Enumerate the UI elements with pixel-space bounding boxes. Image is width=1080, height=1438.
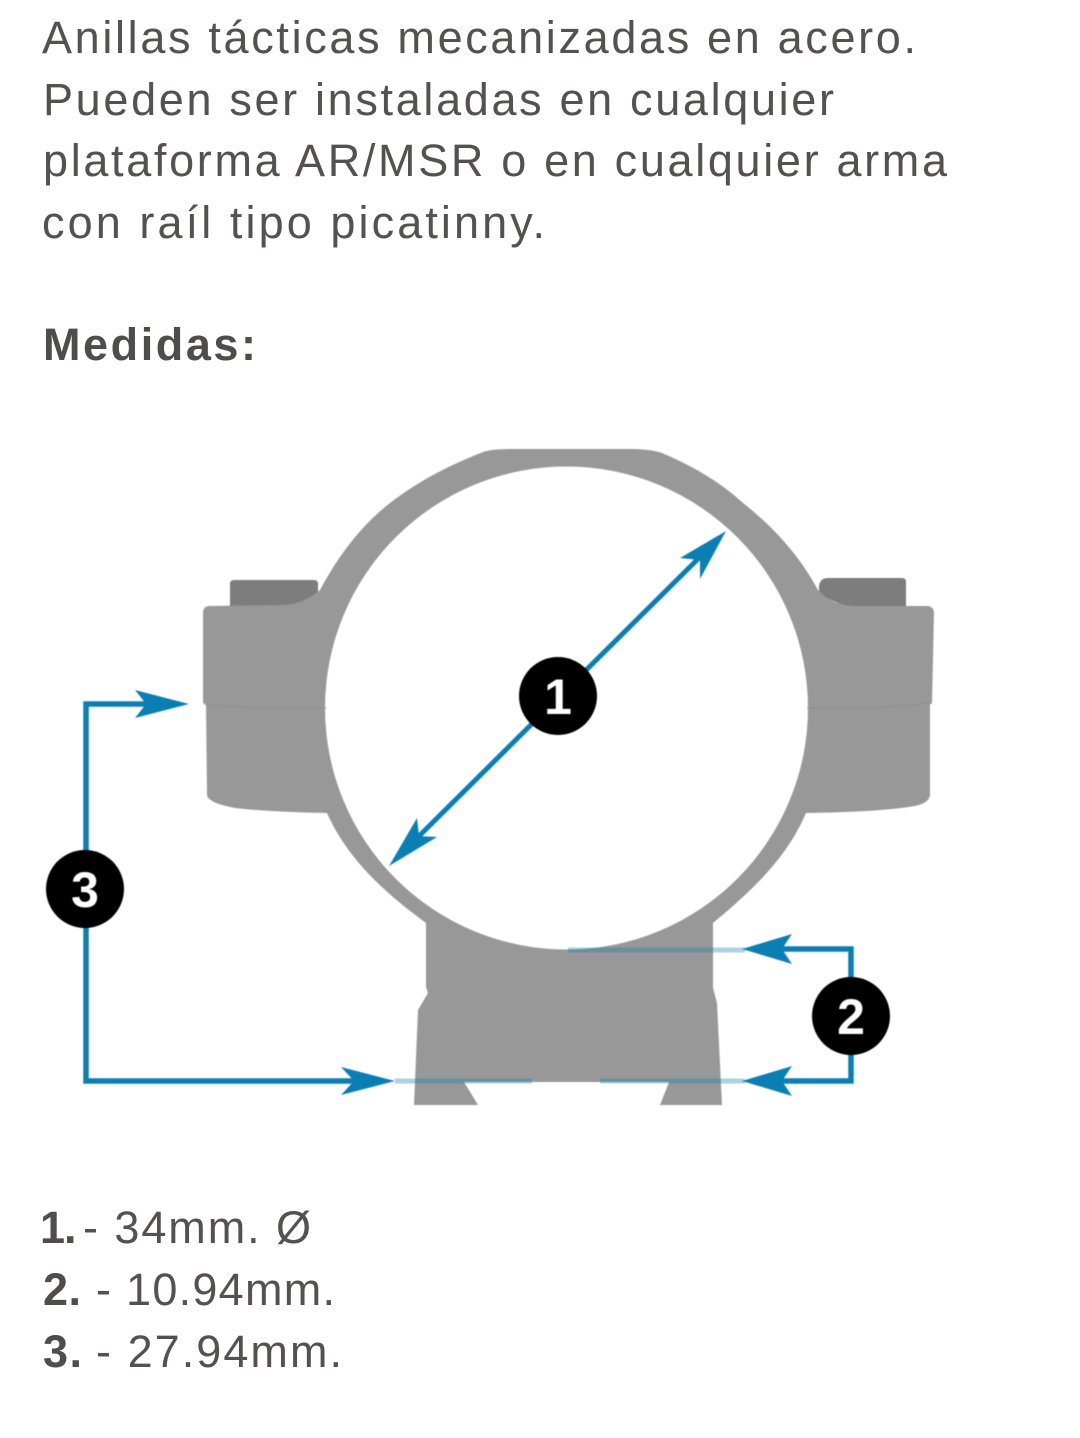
heading: Medidas: Medidas: <box>43 319 256 370</box>
badge 3: 3 <box>71 862 99 918</box>
diagram: scope ring with measurements <box>46 449 934 1105</box>
arrow 2: base height <box>568 934 851 1096</box>
measurement 3: 3. <box>43 1326 82 1377</box>
measurement 3: - 27.94mm. <box>96 1326 342 1377</box>
badge 1 <box>519 657 597 735</box>
arrow 1: diameter <box>389 531 726 866</box>
measurements list <box>40 1202 342 1377</box>
arrow 3: height <box>86 690 532 1095</box>
intro paragraph: Pueden ser instaladas en cualquier <box>43 74 834 125</box>
measurement 1: . <box>64 1202 77 1253</box>
badge 3 <box>46 850 124 928</box>
intro paragraph: plataforma AR/MSR o en cualquier arma <box>43 135 948 186</box>
intro paragraph <box>42 12 948 248</box>
measurement 2: 2. <box>43 1264 81 1315</box>
badge 2: 2 <box>837 989 865 1045</box>
intro paragraph: con raíl tipo picatinny. <box>42 197 545 248</box>
measurement 2: - 10.94mm. <box>96 1264 335 1315</box>
badge 2 <box>812 977 890 1055</box>
measurement 1: 1 <box>40 1202 65 1253</box>
ring body <box>203 449 934 1105</box>
intro paragraph: Anillas tácticas mecanizadas en acero. <box>42 12 916 63</box>
measurement 1: - 34mm. Ø <box>83 1202 311 1253</box>
badge 1: 1 <box>544 669 572 725</box>
ring caps <box>230 578 906 608</box>
ring bore <box>325 466 808 950</box>
ring seam <box>204 703 932 708</box>
